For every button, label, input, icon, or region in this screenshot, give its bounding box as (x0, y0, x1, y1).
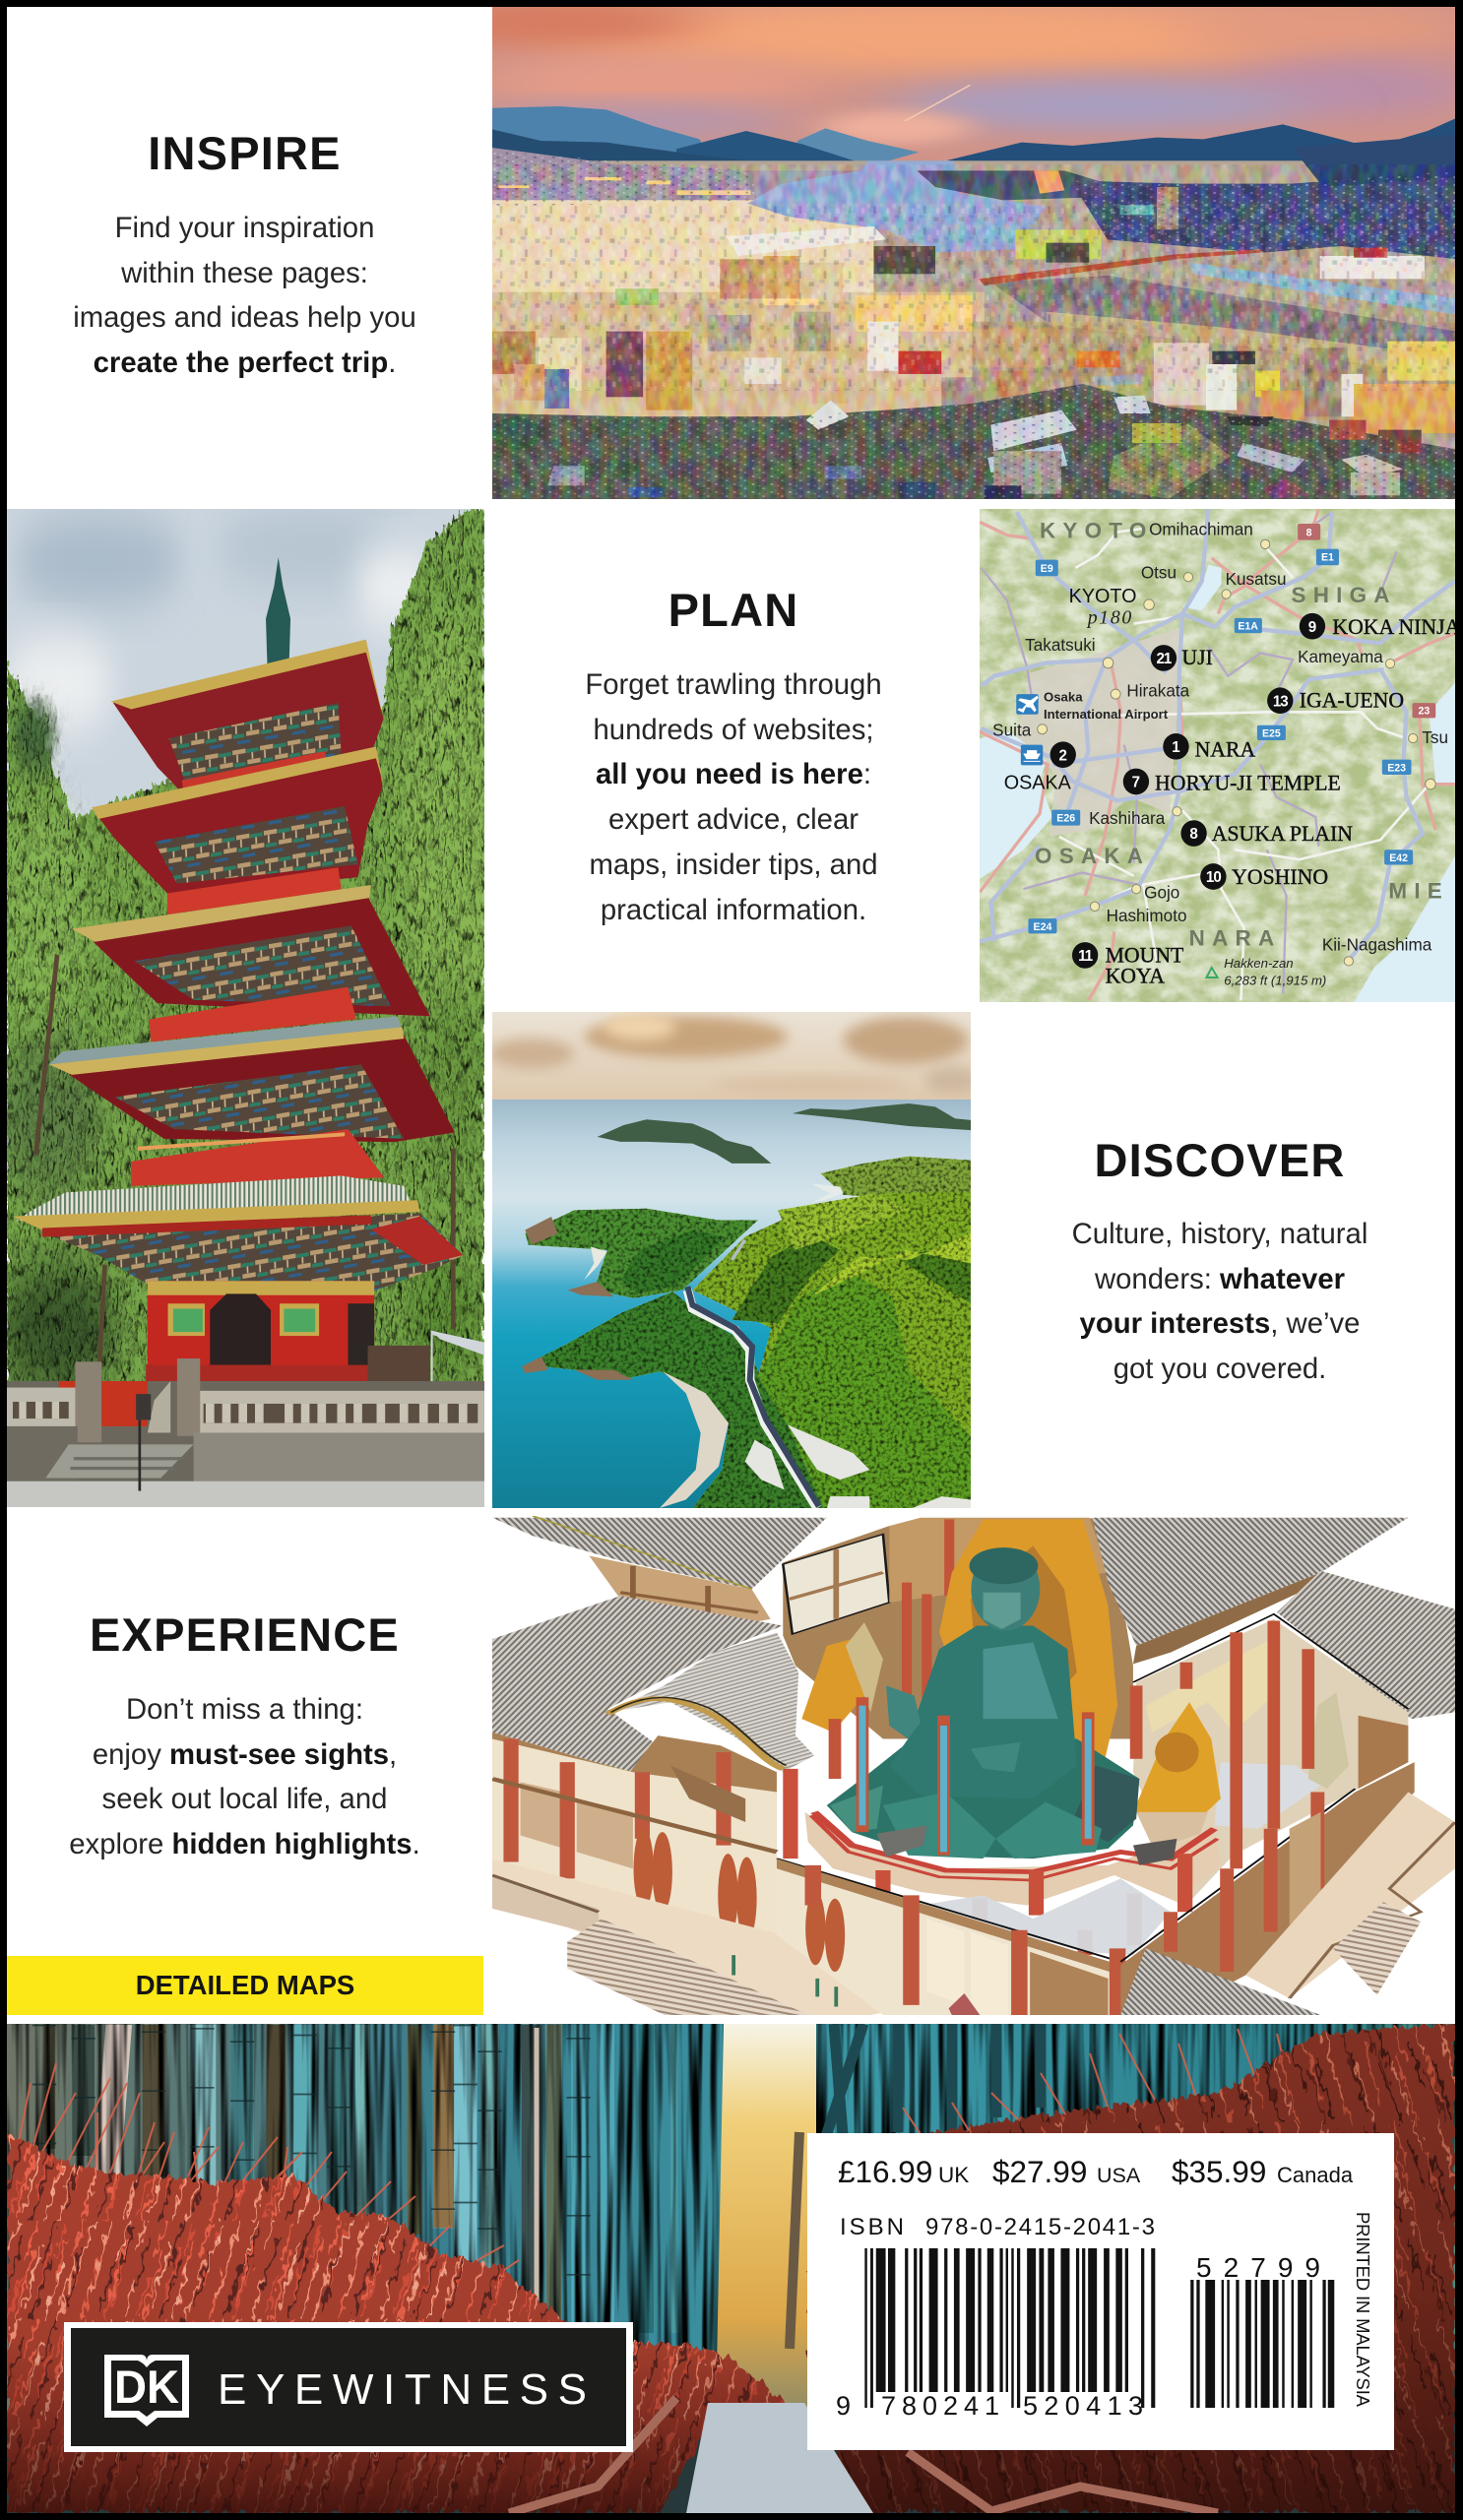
harbour water (747, 160, 1046, 253)
numbered sights: KOYA (1106, 964, 1165, 987)
road shields: E42 (1389, 852, 1408, 864)
borders and secondary lines (982, 512, 1397, 994)
banner: detailed maps: DETAILED MAPS (136, 1970, 354, 2000)
barcode digits: 9 (836, 2391, 851, 2421)
coast rocks (522, 1217, 633, 1380)
ISBN: ISBN (840, 2214, 904, 2240)
tier 5 roof (13, 1175, 463, 1292)
icon: DK book: DK (114, 2361, 179, 2413)
text block: discover description: got you covered. (1113, 1353, 1326, 1385)
numbered sights: MOUNT (1106, 943, 1183, 967)
photo: Nagasaki city at dusk (492, 7, 1455, 499)
front cutaway wall (777, 1858, 1120, 2015)
town names: Suita (992, 720, 1032, 739)
numbered sights: 13 (1273, 693, 1288, 710)
heading: EXPERIENCE: EXPERIENCE (90, 1608, 400, 1661)
port buildings (727, 226, 886, 256)
road shields: E25 (1262, 727, 1281, 739)
left facade (492, 1738, 777, 1940)
floor (921, 1878, 1171, 1955)
dark foreground (492, 384, 1457, 502)
large bamboo culms (44, 2025, 677, 2333)
sky (3, 509, 484, 961)
region names: OSAKA (1035, 844, 1150, 868)
text block: discover description: Culture, history, natural (1072, 1218, 1368, 1250)
stone fence and steps (7, 1358, 484, 1507)
numbered sights: 1 (1172, 739, 1180, 756)
tree roots (509, 2398, 1218, 2513)
urban areas (1017, 627, 1182, 837)
town names: KYOTO (1069, 586, 1137, 607)
right roofs (1093, 1518, 1455, 1719)
right dark culms (824, 2024, 1041, 2147)
text block: experience description: enjoy must-see sights, (93, 1738, 397, 1771)
town names: Tsu (1422, 727, 1448, 747)
text block: inspire description: within these pages: (121, 257, 368, 289)
town names: Takatsuki (1025, 635, 1096, 655)
sea and lake (980, 565, 1455, 1002)
town names: Kii-Nagashima (1322, 935, 1432, 955)
town names: Omihachiman (1149, 520, 1253, 539)
ISBN: 978-0-2415-2041-3 (925, 2214, 1155, 2240)
visitors (732, 1955, 838, 2007)
interior pillars (791, 1620, 1308, 1955)
prices: $27.99 (992, 2154, 1087, 2189)
text block: inspire description: create the perfect trip. (94, 346, 396, 379)
numbered sights: NARA (1195, 737, 1255, 761)
barcode main (864, 2248, 1155, 2408)
photo: five-storey pagoda (7, 509, 484, 1507)
photo: Kerama islands aerial (492, 1012, 971, 1508)
illustration: Todai-ji Great Buddha hall cutaway (492, 1516, 1455, 2015)
text block: inspire description (73, 212, 416, 379)
wordmark: EYEWITNESS (218, 2365, 587, 2414)
region names: SHIGA (1292, 583, 1397, 607)
town names: Otsu (1141, 562, 1177, 583)
photo: Arashiyama bamboo grove (7, 2024, 1455, 2513)
tier 1 (110, 640, 384, 796)
town names: Kusatsu (1226, 569, 1286, 589)
pagoda base hall (146, 1281, 484, 1391)
town names (992, 520, 1448, 987)
numbered sights: 2 (1059, 747, 1067, 764)
blue motorways (980, 509, 1455, 961)
text block: plan description: practical information. (601, 894, 866, 926)
town names: Gojo (1144, 882, 1179, 902)
road shields: E9 (1041, 563, 1053, 575)
tier 2 (92, 747, 384, 914)
town names: Osaka (1044, 689, 1083, 704)
prices: £16.99 (838, 2154, 932, 2189)
grass wisps (13, 2029, 1287, 2280)
main hills (525, 1156, 971, 1508)
text block: plan description (585, 668, 882, 926)
road shields: E1 (1321, 552, 1334, 564)
town names: p180 (1086, 606, 1133, 629)
base dark (7, 2024, 1455, 2513)
text block: plan description: maps, insider tips, and (589, 849, 878, 881)
road shields: 23 (1418, 706, 1430, 718)
construction site (745, 1424, 971, 1508)
right statues (801, 1622, 1349, 1846)
panel: price and barcode (807, 2133, 1394, 2450)
barcode digits: 780241 (881, 2391, 999, 2421)
prices: UK (938, 2163, 969, 2187)
roofs and houses (990, 410, 1077, 451)
text block: inspire description: images and ideas help you (73, 301, 416, 334)
central timber frame (783, 1518, 1133, 1738)
text block: plan description: expert advice, clear (608, 803, 859, 836)
logo: DK Eyewitness (64, 2322, 633, 2452)
text block: experience description: seek out local life, and (102, 1783, 387, 1815)
prices: Canada (1277, 2163, 1354, 2187)
great Buddha (827, 1547, 1139, 1858)
town names: Kameyama (1298, 647, 1383, 666)
icons: airport and ferry (1016, 694, 1043, 765)
buildings (763, 256, 799, 298)
golden halo (939, 1519, 1117, 1772)
tier 3 (72, 885, 430, 1041)
numbered sights: 8 (1189, 826, 1198, 843)
colour variation overlay (492, 164, 1455, 499)
numbered sights: 9 (1308, 619, 1316, 636)
text block: experience description: Don’t miss a thing: (126, 1693, 363, 1726)
barcode digits (836, 2391, 1143, 2421)
path (686, 2403, 873, 2513)
numbered sights: 7 (1132, 775, 1140, 791)
front lower roof (1120, 1948, 1320, 2015)
printed in Malaysia: PRINTED IN MALAYSIA (1353, 2212, 1373, 2408)
city detail layer (492, 135, 1457, 502)
numbered sights: 21 (1156, 651, 1173, 667)
text block: plan description: hundreds of websites; (593, 714, 874, 746)
region names: NARA (1189, 925, 1281, 950)
road shields: E1A (1238, 620, 1258, 633)
town names: OSAKA (1004, 773, 1072, 794)
numbered sights: YOSHINO (1232, 865, 1328, 889)
road shields: E26 (1056, 813, 1075, 825)
region names (1035, 518, 1449, 950)
culm nodes (44, 2025, 579, 2333)
numbered sights: ASUKA PLAIN (1212, 822, 1353, 846)
right walls (1120, 1762, 1455, 2015)
ground terrace and steps (492, 1858, 908, 2015)
town dots (1038, 539, 1435, 966)
road shields: E24 (1034, 921, 1051, 933)
white roads (1059, 529, 1430, 1000)
numbered sights: 11 (1078, 948, 1094, 965)
city base (492, 160, 1457, 502)
lit building blocks (492, 292, 985, 416)
region names: MIE (1388, 878, 1449, 903)
banner: detailed maps (7, 1956, 483, 2015)
logo panel (64, 2322, 633, 2452)
road shields: E23 (1387, 762, 1406, 774)
relief shading (980, 509, 1455, 1002)
left roofs (492, 1516, 827, 1858)
heading: INSPIRE: INSPIRE (148, 127, 342, 179)
prices: USA (1097, 2164, 1141, 2187)
region names: KYOTO (1040, 518, 1154, 542)
text block: plan description: Forget trawling through (585, 668, 882, 701)
rail yard and river (990, 276, 1457, 357)
town names: Hakken-zan (1224, 956, 1294, 971)
town names: Hashimoto (1107, 906, 1186, 925)
town names: Hirakata (1126, 680, 1190, 700)
red grass right (809, 2024, 1455, 2513)
numbered sights: IGA-UENO (1300, 689, 1404, 713)
tree trunks (35, 955, 453, 1388)
prices: $35.99 (1172, 2154, 1266, 2189)
trunk in gap (790, 2132, 799, 2349)
map: Kansai region (980, 509, 1455, 1002)
supplementary digits: 52799 (1196, 2252, 1320, 2283)
road (687, 1290, 817, 1508)
bamboo wall (7, 2024, 1455, 2418)
text block: plan description: all you need is here: (596, 758, 871, 790)
town names: Kashihara (1089, 808, 1166, 828)
barcode digits: 520413 (1023, 2391, 1143, 2421)
text block: discover description: your interests, we’ve (1080, 1307, 1360, 1340)
sky and mountains (419, 0, 1463, 236)
text block: discover description (1072, 1218, 1368, 1385)
road shields: 8 (1306, 527, 1312, 538)
road shields (1028, 524, 1435, 933)
town names: International Airport (1044, 707, 1169, 722)
sky and clouds (489, 1012, 978, 1101)
beach (660, 1371, 729, 1508)
numbered sights: UJI (1181, 646, 1213, 669)
text block: inspire description: Find your inspiration (115, 212, 374, 244)
numbered sights (1050, 613, 1461, 987)
heading: DISCOVER: DISCOVER (1094, 1134, 1346, 1186)
lights (498, 177, 973, 318)
platform and railing (805, 1812, 1221, 1905)
sea (492, 1100, 971, 1508)
supplementary barcode (1190, 2280, 1334, 2408)
numbered sights: 10 (1206, 869, 1221, 886)
icon: DK book (104, 2355, 189, 2426)
prices (838, 2154, 1354, 2189)
pink roads (980, 509, 1455, 1000)
forest (0, 509, 509, 1394)
tier 4 (49, 1016, 455, 1186)
text block: discover description: wonders: whatever (1095, 1263, 1345, 1295)
sunlit gap (716, 2024, 816, 2418)
window texture over the city (492, 204, 1455, 391)
spire (266, 557, 290, 671)
text block: experience description (69, 1693, 420, 1860)
hillside speckle (492, 151, 1457, 502)
text block: experience description: explore hidden highlights. (69, 1828, 420, 1860)
heading: PLAN: PLAN (668, 584, 798, 636)
map base (980, 509, 1455, 1002)
pale culm (534, 2028, 540, 2339)
distant islands (598, 1103, 971, 1164)
town names: 6,283 ft (1,915 m) (1224, 973, 1326, 987)
right interior (1133, 1614, 1408, 1902)
red grass left (7, 2133, 785, 2513)
numbered sights: HORYU-JI TEMPLE (1155, 772, 1341, 795)
